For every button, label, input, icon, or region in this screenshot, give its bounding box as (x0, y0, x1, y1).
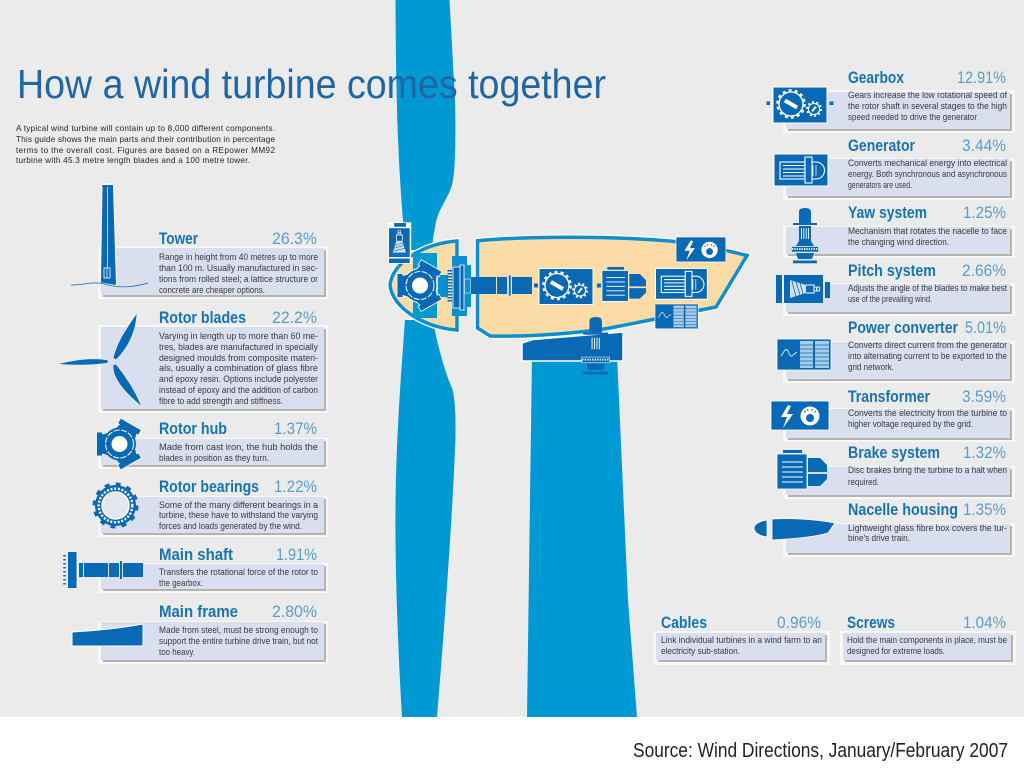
panel: rotor blades: designed moulds from composite materi- (159, 353, 318, 363)
icon: yaw system (792, 208, 818, 263)
panel: main frame: support the entire turbine drive train, but not (159, 636, 318, 646)
icon: brake system (777, 450, 827, 489)
icon: tower (71, 183, 148, 287)
bearing ticks (448, 270, 452, 302)
panel: main shaft: Transfers the rotational force of the rotor to (159, 567, 318, 577)
icon: pitch system (776, 275, 830, 303)
panel: gearbox: speed needed to drive the generator (848, 112, 977, 122)
panel: transformer: Transformer (848, 387, 930, 406)
diagram: turbine nacelle assembly (388, 222, 747, 375)
panel: rotor bearings (98, 477, 328, 537)
icon: nacelle housing (754, 519, 835, 540)
hub connector (438, 275, 448, 297)
panel: main frame: too heavy. (159, 647, 195, 657)
main shaft in diagram (464, 275, 601, 296)
intro text: turbine with 45.3 metre length blades and a 100 metre tower. (16, 156, 250, 165)
panel: rotor blades: fibre to add strength and stiffness. (159, 396, 283, 406)
main frame in diagram (522, 332, 623, 361)
panel: main frame: 2.80% (272, 603, 317, 621)
panel: rotor blades: and epoxy resin. Options include polyester (159, 374, 318, 384)
panel: transformer (783, 387, 1015, 442)
hub cover (390, 241, 457, 330)
panel: rotor hub: 1.37% (274, 420, 317, 438)
panel: rotor hub: blades in position as they turn. (159, 453, 269, 463)
panel: gearbox (783, 68, 1015, 133)
icon: rotor hub (96, 418, 141, 470)
panel: tower: Range in height from 40 metres up to more (159, 252, 318, 262)
panel: yaw system (783, 203, 1015, 258)
pitch system in diagram (388, 222, 411, 264)
nacelle body (478, 237, 747, 336)
panel: rotor bearings: Some of the many different bearings in a (159, 500, 318, 510)
shaft flange (453, 267, 460, 308)
panel: power converter (783, 318, 1015, 383)
panel: main frame: Main frame (159, 602, 238, 621)
panel: cables: electricity sub-station. (661, 646, 740, 656)
icon: rotor bearings (94, 484, 137, 527)
panel: yaw system: Yaw system (848, 203, 927, 222)
panel: gearbox: Gears increase the low rotational speed of (848, 90, 1007, 100)
panel: brake system: 1.32% (963, 444, 1006, 462)
icon: transformer (771, 401, 829, 430)
panel: rotor blades: instead of epoxy and the addition of carbon (159, 385, 318, 395)
panel: screws: designed for extreme loads. (847, 646, 945, 656)
lower rotor blade (395, 320, 456, 717)
icon: gearbox (766, 87, 834, 123)
panel: brake system: required. (848, 477, 879, 487)
upper rotor blade (396, 0, 455, 250)
panel: rotor bearings: turbine, these have to withstand the varying (159, 510, 318, 520)
panel: generator: energy. Both synchronous and asynchronous (848, 169, 1007, 179)
panel: main shaft: the gearbox. (159, 578, 203, 588)
icon: generator (774, 154, 828, 186)
panel: main shaft: 1.91% (276, 546, 317, 564)
panel: transformer: 3.59% (962, 388, 1006, 406)
intro text: This guide shows the main parts and their contribution in percentage (16, 135, 275, 144)
panel: pitch system (783, 261, 1015, 316)
panel: main shaft: Main shaft (159, 545, 233, 564)
panel: yaw system: Mechanism that rotates the nacelle to face (848, 226, 1007, 236)
panel: pitch system: use of the prevailing wind. (848, 294, 932, 304)
title: How a wind turbine comes together (17, 61, 606, 107)
panel: nacelle housing: Lightweight glass fibre box covers the tur- (848, 523, 1007, 533)
panel: cables: Cables (661, 613, 707, 632)
intro text: A typical wind turbine will contain up to 8,000 different components. (16, 124, 275, 133)
panel: power converter: into alternating current to be exported to the (848, 351, 1007, 361)
panel: transformer: Converts the electricity from the turbine to (848, 408, 1007, 418)
bearing flange rear (467, 265, 471, 307)
panel: generator (783, 136, 1015, 200)
panel: power converter: Converts direct current from the generator (848, 340, 1007, 350)
panel: rotor bearings: 1.22% (274, 478, 317, 496)
hub cover halo (390, 241, 457, 330)
panel: rotor hub: Made from cast iron, the hub holds the (159, 442, 318, 452)
panel: power converter: grid network. (848, 362, 894, 372)
panel: tower: concrete are cheaper options. (159, 285, 265, 295)
panel: gearbox: 12.91% (957, 69, 1006, 87)
panel: main shaft (98, 545, 328, 593)
panel: tower: 26.3% (272, 230, 317, 248)
panel: nacelle housing: 1.35% (963, 501, 1006, 519)
panel: pitch system: 2.66% (962, 262, 1006, 280)
panel: nacelle housing: bine's drive train. (848, 533, 910, 543)
panel: screws (840, 613, 1016, 665)
gearbox in diagram (539, 268, 593, 304)
panel: screws: Screws (847, 613, 895, 632)
panel: transformer: higher voltage required by the grid. (848, 419, 973, 429)
icon: power converter (777, 339, 831, 370)
panel: rotor blades: Rotor blades (159, 308, 246, 327)
panel: pitch system: Pitch system (848, 261, 936, 280)
icon: rotor blades (57, 313, 142, 407)
bearing flange (452, 256, 467, 316)
intro text: terms to the overall cost. Figures are based on a REpower MM92 (16, 146, 275, 155)
panel: tower (98, 229, 328, 299)
tower (527, 355, 637, 717)
panel: power converter: 5.01% (965, 319, 1006, 337)
nacelle outline (478, 237, 747, 336)
power converter in diagram (655, 304, 698, 329)
panel: brake system (783, 443, 1015, 499)
panel: cables: Link individual turbines in a wind farm to an (661, 635, 822, 645)
panel: tower: Tower (159, 229, 198, 248)
panel: screws: 1.04% (963, 614, 1006, 632)
panel: pitch system: Adjusts the angle of the blades to make best (848, 283, 1007, 293)
panel: generator: 3.44% (962, 137, 1006, 155)
panel: brake system: Disc brakes bring the turbine to a halt when (848, 465, 1007, 475)
panel: generator: generators are used. (848, 180, 912, 190)
panel: main frame: Made from steel, must be strong enough to (159, 625, 318, 635)
shaft collar (460, 265, 464, 310)
panel: nacelle housing: Nacelle housing (848, 500, 958, 519)
icon: main shaft (64, 552, 143, 588)
panel: yaw system: the changing wind direction. (848, 237, 949, 247)
panel: cables: 0.96% (777, 614, 821, 632)
panel: yaw system: 1.25% (963, 204, 1006, 222)
transformer in diagram (676, 237, 726, 262)
panel: rotor bearings: Rotor bearings (159, 477, 259, 496)
blade roots in hub (413, 253, 437, 318)
intro text (16, 124, 275, 165)
icon: main frame (72, 624, 143, 646)
panel: cables (653, 613, 830, 665)
panel: tower: tions from rolled steel; a lattice structure or (159, 274, 318, 284)
panel: screws: Hold the main components in place, must be (847, 635, 1007, 645)
panel: brake system: Brake system (848, 443, 940, 462)
panel: rotor blades: Varying in length up to more than 60 me- (159, 331, 318, 341)
panel: rotor blades: 22.2% (272, 309, 317, 327)
panel: rotor hub (98, 419, 328, 469)
panel: rotor blades: als, usually a combination of glass fibre (159, 363, 318, 373)
panel: rotor bearings: forces and loads generated by the wind. (159, 521, 302, 531)
brake in diagram (602, 267, 646, 301)
yaw system in diagram (582, 317, 610, 375)
panel: tower: than 100 m. Usually manufactured in sec- (159, 263, 318, 273)
panel: nacelle housing (783, 500, 1015, 557)
panel: main frame (98, 602, 328, 664)
panel: generator: Generator (848, 136, 915, 155)
panel: power converter: Power converter (848, 318, 958, 337)
panel: rotor blades: tres, blades are manufactured in specially (159, 342, 318, 352)
rotor hub in diagram (397, 260, 442, 311)
generator in diagram (656, 268, 707, 299)
panel: gearbox: Gearbox (848, 68, 904, 87)
panel: generator: Converts mechanical energy into electrical (848, 158, 1007, 168)
panel: rotor blades (98, 308, 328, 413)
panel: gearbox: the rotor shaft in several stages to the high (848, 101, 1007, 111)
panel: rotor hub: Rotor hub (159, 419, 227, 438)
